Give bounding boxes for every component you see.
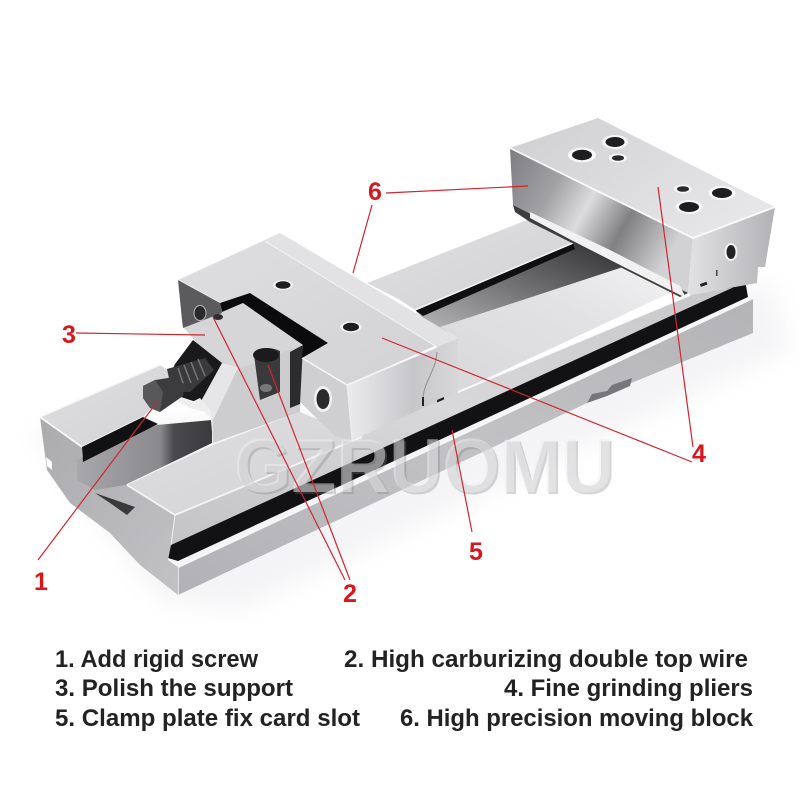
caption 5: 5. Clamp plate fix card slot (55, 705, 360, 732)
jaw top holes (273, 280, 293, 290)
moving block side hole (314, 386, 332, 412)
vise illustration (40, 118, 775, 595)
polished support top (183, 303, 303, 368)
moving block right side (347, 338, 458, 440)
watermark: GZRUOMU (234, 424, 614, 509)
front rail top left (127, 412, 360, 515)
black cutout edge (220, 293, 328, 358)
left back rail top (40, 365, 178, 447)
caption 1: 1. Add rigid screw (55, 646, 258, 673)
callout 1: 1 (34, 568, 48, 596)
moving block (178, 233, 458, 443)
left channel floor (76, 420, 212, 490)
rail opening (415, 243, 623, 335)
callout 4 (382, 187, 706, 468)
moving block front leg (300, 358, 352, 440)
screw thread (167, 358, 214, 392)
caption 2: 2. High carburizing double top wire (344, 646, 748, 673)
back rail right of jaw (367, 220, 573, 310)
jaw top holes (568, 135, 736, 214)
callout 2 (213, 317, 357, 608)
callout 5: 5 (469, 538, 483, 566)
hex head (143, 378, 185, 412)
front rail top right (440, 267, 672, 392)
nut block front (213, 345, 303, 443)
jaw side hole (724, 243, 738, 261)
callout 5 (452, 430, 483, 566)
callout 6 (353, 178, 528, 273)
callout 3: 3 (62, 321, 76, 349)
screw assembly (143, 340, 222, 420)
callout 4: 4 (692, 440, 706, 468)
watermark: GZRUOMU (236, 426, 616, 511)
caption 6: 6. High precision moving block (400, 705, 754, 732)
caption 4: 4. Fine grinding pliers (504, 675, 753, 702)
fixed jaw (510, 118, 775, 298)
caption 3: 3. Polish the support (55, 675, 293, 702)
jaw end dark face (178, 280, 222, 328)
slotted pin hole (253, 348, 280, 400)
callout 6: 6 (368, 178, 382, 206)
callout 1 (34, 402, 157, 596)
callout 2: 2 (343, 580, 357, 608)
front rail side (171, 282, 757, 545)
moving block top (178, 233, 437, 385)
caption list (55, 646, 754, 732)
black clamp slot (168, 280, 748, 561)
base lower plate (178, 298, 753, 595)
left end face (40, 417, 178, 595)
